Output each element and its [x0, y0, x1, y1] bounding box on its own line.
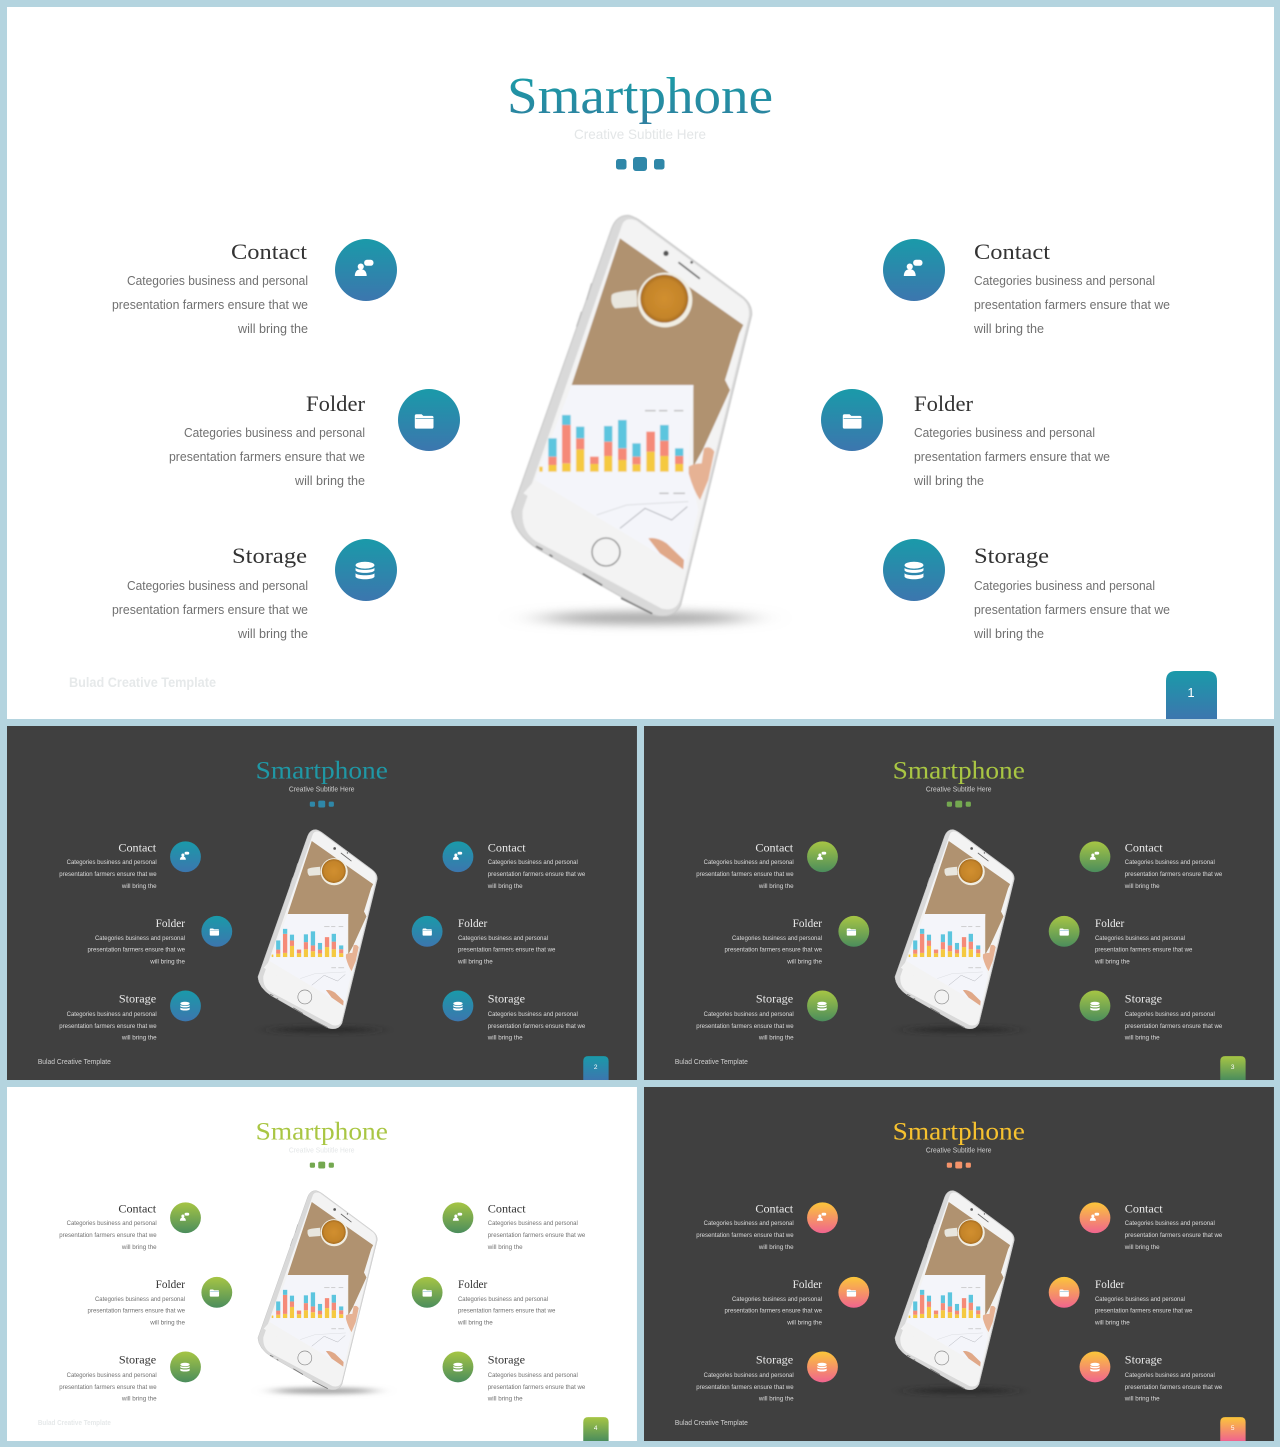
decorative square dots — [616, 157, 664, 171]
icon: storage — [170, 1352, 201, 1382]
heading: Folder — [793, 1279, 822, 1291]
body text: presentation farmers ensure that we — [1125, 1232, 1223, 1239]
body text — [725, 1296, 823, 1327]
body text — [1124, 1372, 1223, 1403]
heading: Folder — [306, 391, 366, 416]
body text: will bring the — [1094, 959, 1130, 966]
item: folder left — [169, 389, 460, 488]
icon: storage — [1080, 1352, 1110, 1382]
body text: will bring the — [1124, 1244, 1160, 1251]
subtitle: Creative Subtitle Here — [574, 126, 706, 142]
body text: will bring the — [149, 959, 186, 966]
body text: Categories business and personal — [458, 935, 548, 942]
item: contact right — [883, 239, 1170, 336]
body text: Categories business and personal — [127, 274, 308, 288]
subtitle: Creative Subtitle Here — [926, 787, 992, 794]
icon: contact — [170, 1202, 201, 1233]
body text: Categories business and personal — [95, 1296, 185, 1303]
page number tab — [1166, 671, 1217, 719]
icon: contact — [807, 1202, 838, 1233]
body text: Categories business and personal — [184, 426, 365, 440]
icon: storage — [1080, 991, 1110, 1021]
body text — [696, 1372, 794, 1403]
body text — [457, 1296, 556, 1327]
body text: Categories business and personal — [704, 859, 794, 866]
body text: will bring the — [121, 1396, 157, 1403]
item: folder left — [725, 916, 869, 966]
body text: presentation farmers ensure that we — [59, 1232, 157, 1239]
slide background — [7, 7, 1274, 719]
icon: contact — [170, 841, 201, 872]
item: storage left — [59, 991, 201, 1042]
heading: Contact — [231, 239, 308, 264]
body text: will bring the — [758, 1396, 794, 1403]
slide 5: dark orange — [644, 1087, 1274, 1441]
heading: Contact — [1125, 1203, 1164, 1215]
icon: contact — [1080, 841, 1110, 872]
body text: will bring the — [294, 474, 365, 488]
icon: contact — [1080, 1202, 1110, 1233]
page number tab: 2 — [594, 1064, 598, 1071]
body text: Categories business and personal — [1125, 1011, 1215, 1018]
item: folder left — [88, 1277, 232, 1327]
body text — [725, 935, 823, 966]
item: contact right — [443, 841, 586, 890]
body text: presentation farmers ensure that we — [974, 298, 1170, 312]
slide 3: dark green — [644, 726, 1274, 1080]
body text: will bring the — [973, 322, 1044, 336]
body text — [1094, 1296, 1193, 1327]
page number tab: 5 — [1231, 1425, 1235, 1432]
body text — [913, 426, 1110, 488]
heading: Storage — [974, 543, 1049, 568]
phone shadow — [909, 1027, 1013, 1033]
body text: presentation farmers ensure that we — [725, 1308, 823, 1315]
heading: Contact — [488, 1203, 527, 1215]
phone shadow — [909, 1388, 1013, 1394]
body text: presentation farmers ensure that we — [974, 603, 1170, 617]
body text: will bring the — [457, 1320, 493, 1327]
item: folder left — [725, 1277, 869, 1327]
heading: Folder — [458, 918, 488, 930]
item: storage right — [1080, 991, 1223, 1042]
body text — [973, 579, 1170, 641]
body text: will bring the — [487, 883, 523, 890]
body text: presentation farmers ensure that we — [696, 1232, 794, 1239]
body text: will bring the — [487, 1396, 523, 1403]
body text: will bring the — [1124, 1035, 1160, 1042]
item: storage right — [443, 991, 586, 1042]
icon: folder — [838, 1277, 869, 1308]
slide background — [644, 1087, 1274, 1441]
decorative square dots — [947, 801, 971, 808]
heading: Folder — [156, 918, 185, 930]
icon: contact — [807, 841, 838, 872]
body text: presentation farmers ensure that we — [914, 450, 1110, 464]
icon: folder — [398, 389, 460, 451]
item: folder right — [1049, 916, 1193, 966]
icon: folder — [821, 389, 883, 451]
body text: presentation farmers ensure that we — [112, 298, 308, 312]
title: Smartphone — [893, 1117, 1025, 1146]
subtitle: Creative Subtitle Here — [926, 1148, 992, 1155]
page number tab — [583, 1417, 609, 1441]
heading: Contact — [118, 1203, 157, 1215]
body text: will bring the — [457, 959, 493, 966]
slide 4: light green — [7, 1087, 637, 1441]
item: folder right — [412, 1277, 556, 1327]
body text: presentation farmers ensure that we — [1095, 1308, 1193, 1315]
icon: storage — [335, 539, 397, 601]
body text: will bring the — [1124, 1396, 1160, 1403]
body text: Categories business and personal — [1125, 1220, 1215, 1227]
body text — [1124, 859, 1223, 890]
icon: folder — [201, 1277, 232, 1308]
icon: folder — [412, 916, 443, 947]
slide 1: large light blue — [7, 7, 1274, 719]
body text: will bring the — [237, 322, 308, 336]
body text: presentation farmers ensure that we — [1125, 871, 1223, 878]
body text: presentation farmers ensure that we — [88, 1308, 186, 1315]
item: folder right — [821, 389, 1110, 488]
heading: Contact — [488, 842, 527, 854]
footer label: Bulad Creative Template — [69, 674, 216, 690]
body text: will bring the — [973, 627, 1044, 641]
body text: Categories business and personal — [974, 579, 1155, 593]
body text: Categories business and personal — [704, 1011, 794, 1018]
body text — [696, 1011, 794, 1042]
body text — [59, 1220, 157, 1251]
icon: folder — [1049, 916, 1080, 947]
heading: Folder — [458, 1279, 488, 1291]
decorative square dots — [310, 801, 334, 808]
slide 2: dark blue — [7, 726, 637, 1080]
body text: Categories business and personal — [127, 579, 308, 593]
body text: will bring the — [786, 959, 823, 966]
item: folder right — [412, 916, 556, 966]
decorative square dots — [947, 1162, 971, 1169]
title: Smartphone — [893, 756, 1025, 785]
body text — [973, 274, 1170, 336]
body text — [487, 1220, 586, 1251]
body text: presentation farmers ensure that we — [458, 947, 556, 954]
body text — [1124, 1011, 1223, 1042]
body text: will bring the — [1124, 883, 1160, 890]
body text: presentation farmers ensure that we — [488, 871, 586, 878]
page number tab: 1 — [1187, 685, 1195, 700]
item: contact right — [1080, 841, 1223, 890]
phone mockup — [512, 215, 752, 616]
heading: Storage — [488, 1354, 525, 1366]
item: storage right — [883, 539, 1170, 641]
body text: Categories business and personal — [488, 1372, 578, 1379]
body text: Categories business and personal — [67, 859, 157, 866]
body text: will bring the — [121, 883, 157, 890]
heading: Storage — [232, 543, 307, 568]
body text: will bring the — [758, 1035, 794, 1042]
phone mockup — [895, 1191, 1014, 1390]
body text: Categories business and personal — [67, 1372, 157, 1379]
body text: will bring the — [487, 1244, 523, 1251]
body text: Categories business and personal — [67, 1011, 157, 1018]
heading: Contact — [1125, 842, 1164, 854]
body text: Categories business and personal — [732, 1296, 822, 1303]
body text: presentation farmers ensure that we — [488, 1023, 586, 1030]
body text: presentation farmers ensure that we — [169, 450, 365, 464]
title: Smartphone — [256, 756, 388, 785]
body text: will bring the — [149, 1320, 186, 1327]
page number tab — [583, 1056, 609, 1080]
phone shadow — [540, 612, 750, 624]
page number tab: 4 — [594, 1425, 598, 1432]
slide background — [644, 726, 1274, 1080]
body text: Categories business and personal — [1125, 1372, 1215, 1379]
body text: presentation farmers ensure that we — [725, 947, 823, 954]
body text: Categories business and personal — [488, 1220, 578, 1227]
icon: folder — [412, 1277, 443, 1308]
heading: Storage — [1125, 1354, 1162, 1366]
heading: Storage — [756, 993, 793, 1005]
body text: presentation farmers ensure that we — [1095, 947, 1193, 954]
body text: presentation farmers ensure that we — [488, 1384, 586, 1391]
body text: will bring the — [786, 1320, 823, 1327]
item: folder right — [1049, 1277, 1193, 1327]
icon: folder — [1049, 1277, 1080, 1308]
item: storage right — [443, 1352, 586, 1403]
body text: will bring the — [237, 627, 308, 641]
heading: Storage — [119, 1354, 156, 1366]
body text — [1124, 1220, 1223, 1251]
item: storage left — [59, 1352, 201, 1403]
item: contact right — [443, 1202, 586, 1251]
body text: presentation farmers ensure that we — [59, 1384, 157, 1391]
phone shadow — [272, 1388, 376, 1394]
body text: Categories business and personal — [1095, 1296, 1185, 1303]
heading: Contact — [974, 239, 1051, 264]
body text — [487, 1011, 586, 1042]
body text: presentation farmers ensure that we — [59, 1023, 157, 1030]
body text: Categories business and personal — [914, 426, 1095, 440]
heading: Storage — [1125, 993, 1162, 1005]
heading: Folder — [1095, 918, 1125, 930]
body text: presentation farmers ensure that we — [458, 1308, 556, 1315]
body text: Categories business and personal — [458, 1296, 548, 1303]
slide background — [7, 1087, 637, 1441]
body text — [59, 1372, 157, 1403]
item: storage left — [696, 1352, 838, 1403]
phone mockup — [895, 830, 1014, 1029]
title: Smartphone — [256, 1117, 388, 1146]
item: contact left — [112, 239, 397, 336]
icon: storage — [170, 991, 201, 1021]
body text: presentation farmers ensure that we — [88, 947, 186, 954]
icon: storage — [807, 991, 838, 1021]
body text: will bring the — [121, 1035, 157, 1042]
icon: contact — [883, 239, 945, 301]
footer label: Bulad Creative Template — [675, 1059, 748, 1066]
decorative square dots — [310, 1162, 334, 1169]
body text: presentation farmers ensure that we — [696, 871, 794, 878]
body text — [112, 274, 308, 336]
icon: storage — [443, 1352, 473, 1382]
body text: will bring the — [1094, 1320, 1130, 1327]
footer label: Bulad Creative Template — [38, 1420, 111, 1427]
subtitle: Creative Subtitle Here — [289, 1148, 355, 1155]
body text — [59, 1011, 157, 1042]
body text: Categories business and personal — [974, 274, 1155, 288]
heading: Contact — [118, 842, 157, 854]
body text: will bring the — [758, 883, 794, 890]
icon: storage — [807, 1352, 838, 1382]
icon: folder — [201, 916, 232, 947]
body text: will bring the — [121, 1244, 157, 1251]
item: contact left — [696, 841, 838, 890]
body text — [696, 1220, 794, 1251]
item: contact left — [59, 841, 201, 890]
heading: Folder — [1095, 1279, 1125, 1291]
phone mockup — [258, 830, 377, 1029]
body text: presentation farmers ensure that we — [488, 1232, 586, 1239]
slide background — [7, 726, 637, 1080]
heading: Folder — [914, 391, 974, 416]
body text — [1094, 935, 1193, 966]
icon: storage — [883, 539, 945, 601]
page number tab: 3 — [1231, 1064, 1235, 1071]
phone mockup — [258, 1191, 377, 1390]
footer label: Bulad Creative Template — [675, 1420, 748, 1427]
heading: Storage — [756, 1354, 793, 1366]
body text — [88, 1296, 186, 1327]
item: storage right — [1080, 1352, 1223, 1403]
item: folder left — [88, 916, 232, 966]
body text: presentation farmers ensure that we — [112, 603, 308, 617]
body text: Categories business and personal — [488, 1011, 578, 1018]
body text: presentation farmers ensure that we — [696, 1023, 794, 1030]
heading: Storage — [488, 993, 525, 1005]
title: Smartphone — [507, 68, 773, 125]
icon: contact — [335, 239, 397, 301]
body text: will bring the — [487, 1035, 523, 1042]
body text: Categories business and personal — [1095, 935, 1185, 942]
heading: Contact — [755, 842, 794, 854]
body text — [487, 859, 586, 890]
body text — [88, 935, 186, 966]
icon: contact — [443, 1202, 473, 1233]
body text — [696, 859, 794, 890]
body text: Categories business and personal — [1125, 859, 1215, 866]
body text — [457, 935, 556, 966]
icon: folder — [838, 916, 869, 947]
heading: Folder — [156, 1279, 185, 1291]
body text: Categories business and personal — [732, 935, 822, 942]
body text — [169, 426, 365, 488]
item: storage left — [696, 991, 838, 1042]
phone shadow — [272, 1027, 376, 1033]
heading: Storage — [119, 993, 156, 1005]
heading: Contact — [755, 1203, 794, 1215]
heading: Folder — [793, 918, 822, 930]
body text — [112, 579, 308, 641]
icon: storage — [443, 991, 473, 1021]
body text: presentation farmers ensure that we — [696, 1384, 794, 1391]
body text — [487, 1372, 586, 1403]
footer label: Bulad Creative Template — [38, 1059, 111, 1066]
item: contact right — [1080, 1202, 1223, 1251]
page number tab — [1220, 1417, 1246, 1441]
body text — [59, 859, 157, 890]
body text: Categories business and personal — [488, 859, 578, 866]
subtitle: Creative Subtitle Here — [289, 787, 355, 794]
item: storage left — [112, 539, 397, 641]
body text: presentation farmers ensure that we — [1125, 1384, 1223, 1391]
icon: contact — [443, 841, 473, 872]
body text: Categories business and personal — [704, 1372, 794, 1379]
body text: Categories business and personal — [704, 1220, 794, 1227]
body text: presentation farmers ensure that we — [1125, 1023, 1223, 1030]
body text: will bring the — [758, 1244, 794, 1251]
body text: presentation farmers ensure that we — [59, 871, 157, 878]
item: contact left — [696, 1202, 838, 1251]
body text: Categories business and personal — [95, 935, 185, 942]
page number tab — [1220, 1056, 1246, 1080]
item: contact left — [59, 1202, 201, 1251]
body text: Categories business and personal — [67, 1220, 157, 1227]
body text: will bring the — [913, 474, 984, 488]
